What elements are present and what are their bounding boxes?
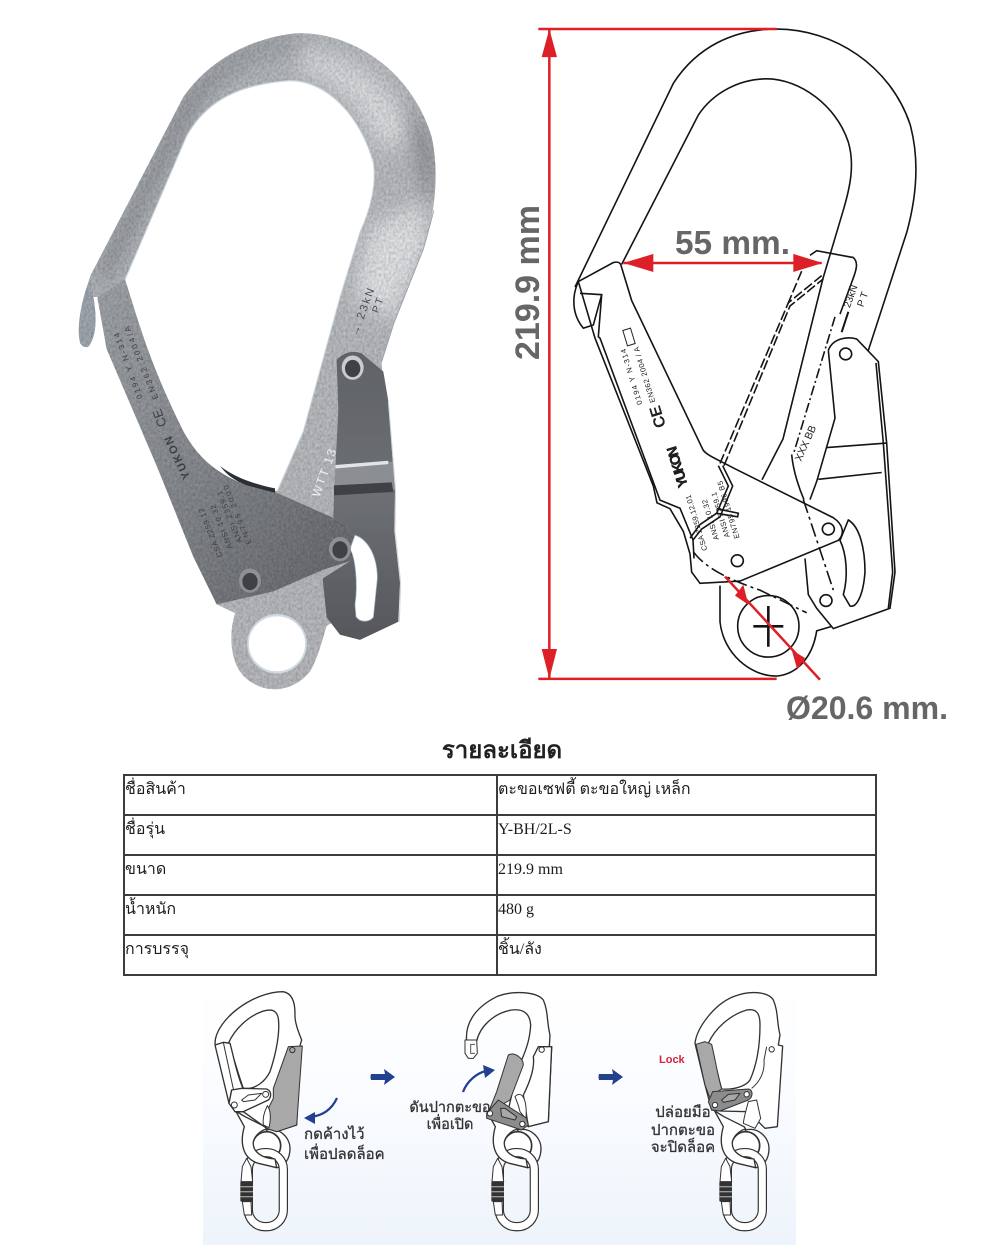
arrow: step 2 to 3 [598, 1069, 623, 1085]
rivet left [239, 568, 261, 593]
caption: step 3: ปล่อยมือ [655, 1104, 711, 1121]
latch lever [323, 352, 400, 640]
latch band shadow [334, 482, 393, 495]
technical outline of hook [574, 29, 916, 676]
caption: step 3 [651, 1104, 715, 1156]
engraved markings: 0194 Y N-314 [112, 331, 145, 400]
specification table [123, 774, 877, 976]
step 1 illustration: press latch [215, 992, 302, 1227]
label: height: 219.9 mm [509, 205, 547, 360]
ring hole rim [248, 615, 306, 672]
curved arrow: press [304, 1098, 337, 1124]
line drawing with dimensions [509, 28, 948, 726]
caption: step 1 [304, 1125, 385, 1163]
engraved markings: P T [371, 296, 386, 315]
specification table: น้ำหนัก [125, 901, 176, 918]
main gate plate [97, 280, 355, 604]
engraved markings: YUKON [163, 434, 193, 481]
engraved text on drawing: CE [647, 403, 670, 430]
latch right edge [388, 401, 401, 622]
curved arrow: open [463, 1065, 495, 1092]
hook body with texture [79, 33, 436, 689]
specification table: Y-BH/2L-S [498, 821, 572, 838]
usage steps panel [203, 991, 796, 1245]
engraved markings: EN795 2000 [221, 484, 253, 546]
caption: step 2: เพื่อเปิด [427, 1114, 473, 1133]
label: eye diameter: Ø20.6 mm. [786, 690, 948, 726]
heading: รายละเอียด [442, 737, 562, 764]
step 2 illustration: push gate [465, 993, 552, 1227]
caption: step 2: ดันปากตะขอ [409, 1100, 491, 1116]
engraved text on drawing: CSA Z359.12.01 [684, 494, 709, 552]
latch band [334, 462, 394, 495]
engraved markings: WTT 13 [309, 447, 339, 499]
engraved markings [112, 287, 386, 559]
red 55 mm opening arrow [623, 254, 823, 272]
caption: step 3: จะปิดล็อค [651, 1137, 715, 1156]
engraved markings: ANSI 10.32 [208, 503, 234, 550]
specification table: ตะขอเซฟตี้ ตะขอใหญ่ เหล็ก [498, 781, 691, 798]
specification table: 480 g [498, 901, 534, 918]
arrow: step 1 to 2 [370, 1069, 395, 1085]
engraved markings: CSA Z259.12 [197, 507, 224, 559]
engraved text on drawing: EN362 2004 / A [632, 346, 657, 404]
specification table: 219.9 mm [498, 861, 563, 878]
specification table: ชิ้น/ลัง [498, 941, 542, 958]
label: opening: 55 mm. [675, 224, 790, 261]
rivet right [329, 537, 351, 561]
product photo: steel scaffold hook [78, 33, 436, 690]
engraved text on drawing: YUKON [663, 445, 691, 489]
caption: step 1: กดค้างไว้ [304, 1125, 365, 1143]
engraved markings: ANSI Z359.1 [215, 490, 244, 544]
engraved text on drawing: XXX BB [793, 424, 819, 463]
specification table: การบรรจุ [125, 941, 189, 958]
engraved text on drawing: ANSI Z359.1 [709, 491, 732, 539]
engraved markings: CE [149, 407, 170, 429]
red diameter arrow [725, 577, 820, 680]
specification table: ชื่อสินค้า [125, 781, 186, 798]
specification table: ขนาด [125, 861, 166, 878]
engraved text on drawing [619, 284, 871, 552]
caption: step 1: เพื่อปลดล็อค [304, 1143, 385, 1163]
step 3 illustration: released and locked [695, 993, 783, 1227]
rivet top [342, 355, 364, 380]
engraved text on drawing: P T [856, 290, 871, 309]
engraved text on drawing: ANSI 10.32 [700, 498, 721, 541]
engraved text on drawing: 23kN [842, 284, 861, 309]
dark shadow under gate [220, 466, 275, 493]
latch band highlight [335, 461, 388, 468]
engraved text on drawing: EN795 1996 B5 [715, 480, 742, 540]
engraved markings: → 23kN [349, 287, 377, 338]
engraved text on drawing: 0194 Y N-314 [619, 348, 644, 406]
inner bevel of the opening [125, 81, 374, 491]
engraved markings: EN362:2004/A [122, 324, 160, 401]
caption: step 2 [409, 1100, 491, 1133]
caption: step 3: ปากตะขอ [651, 1122, 715, 1139]
red height dimension with arrows [538, 29, 777, 679]
specification table: ชื่อรุ่น [125, 821, 165, 838]
latch slot [350, 535, 377, 621]
caption: Lock: Lock [659, 1054, 686, 1066]
outer rim highlight [79, 210, 434, 362]
